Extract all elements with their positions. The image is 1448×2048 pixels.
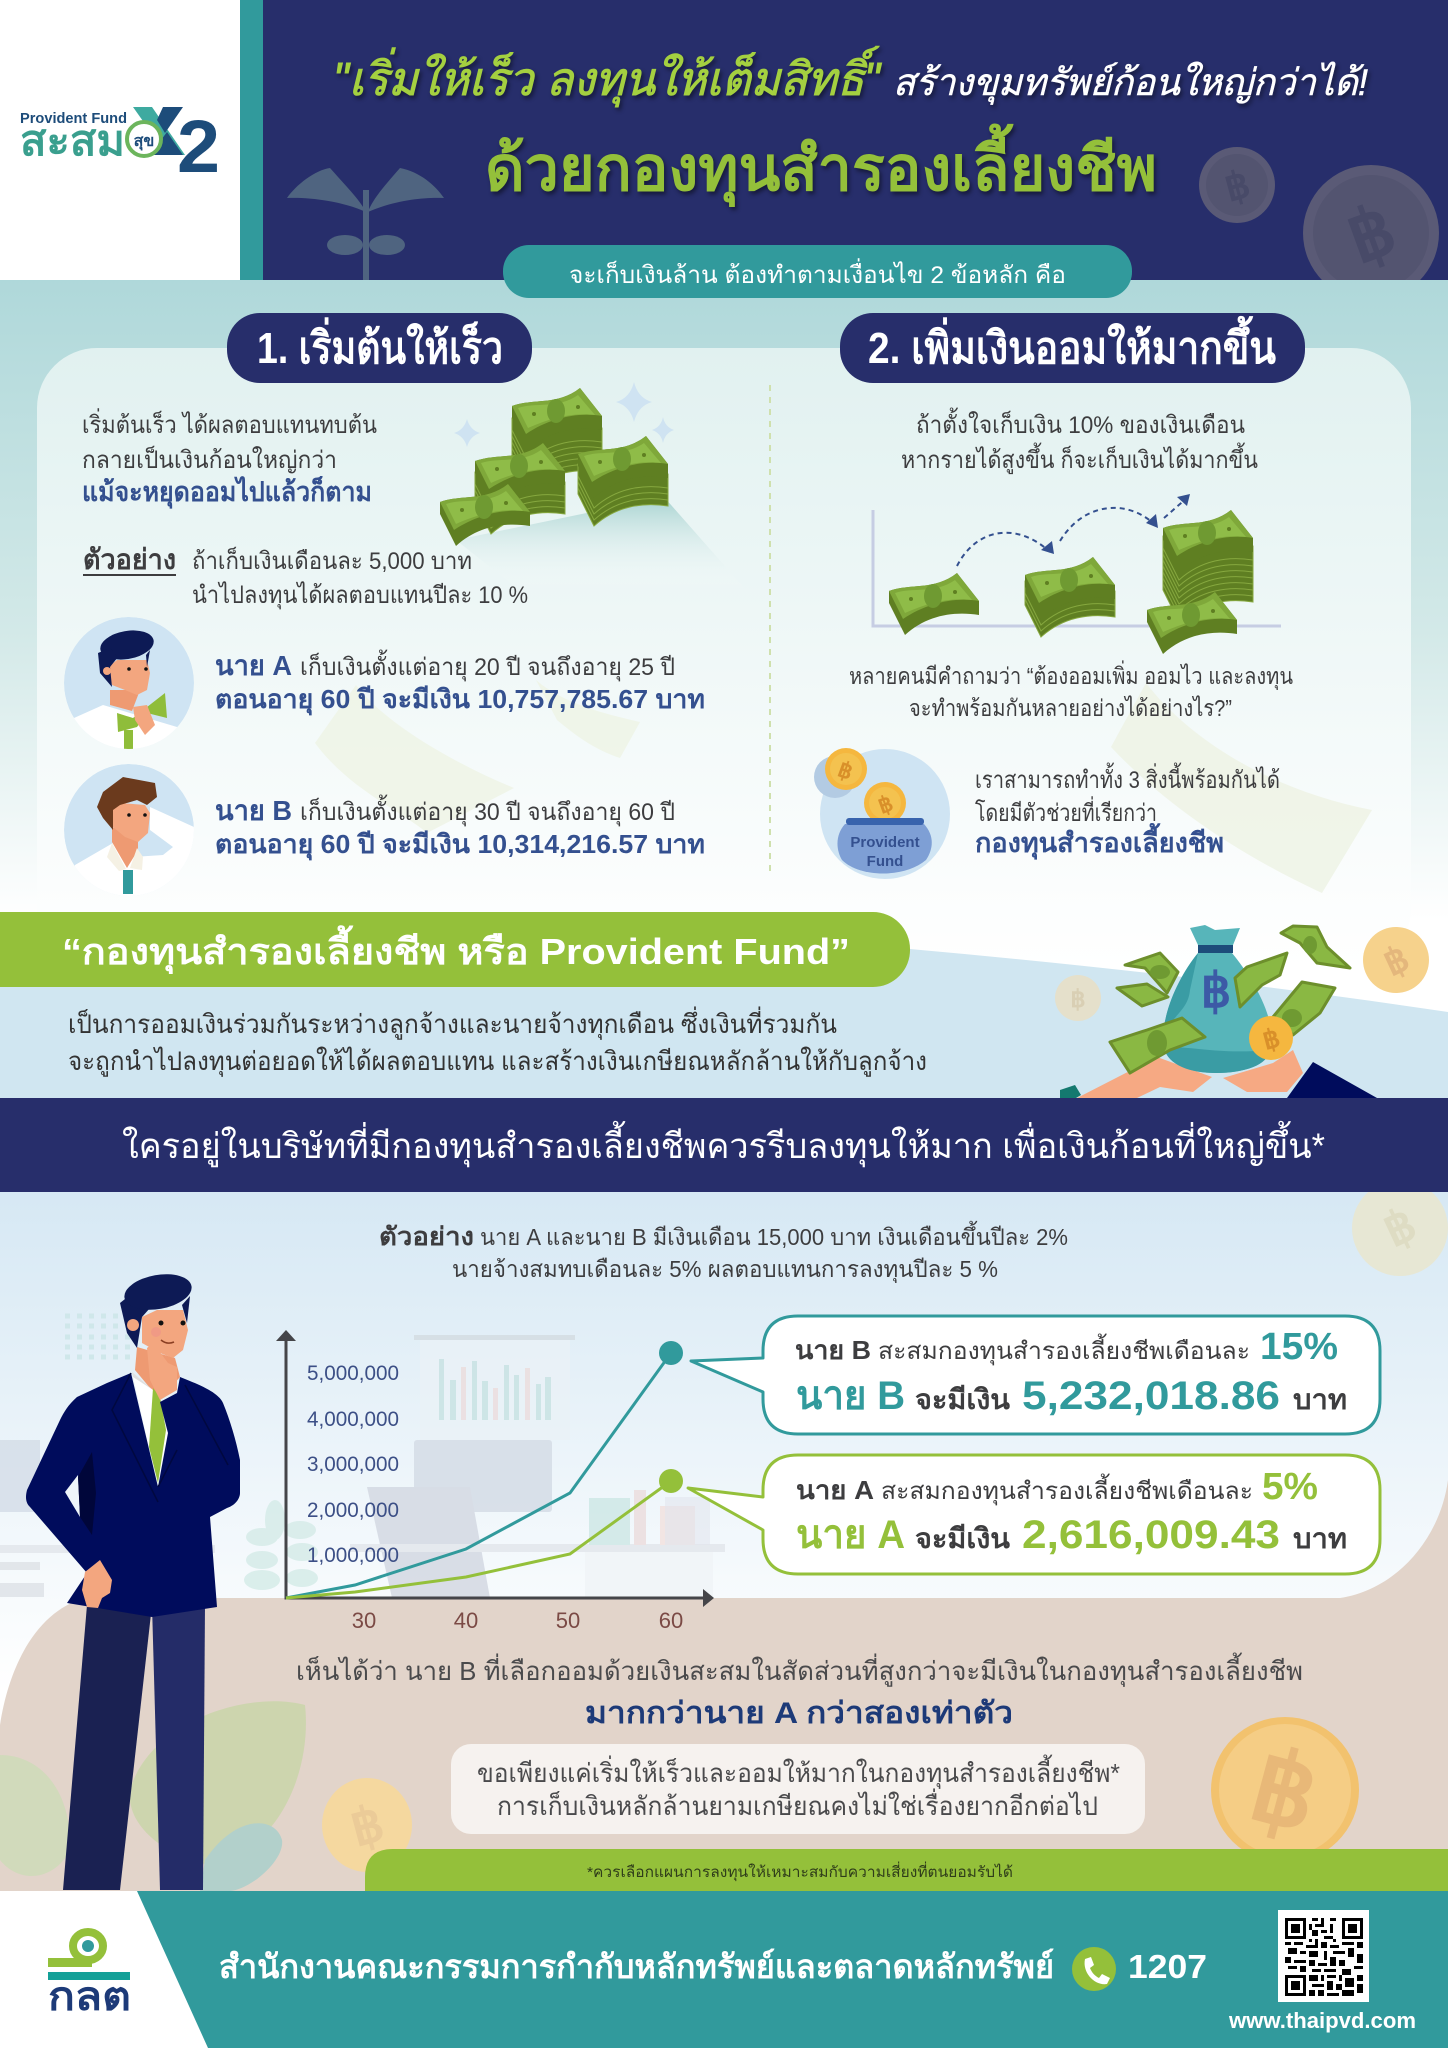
text: example: นำไปลงทุนได้ผลตอบแทนปีละ 10 %: [192, 581, 528, 610]
text: Mr A: นาย A: [215, 650, 292, 681]
gold coin: [1363, 927, 1429, 993]
tie: [149, 1388, 166, 1483]
text: start early: เริ่มต้นเร็ว ได้ผลตอบแทนทบต้น: [82, 408, 377, 439]
callout: Mr B: 15%: [1260, 1326, 1338, 1368]
text: example intro: นายจ้างสมทบเดือนละ 5% ผลตอบแทนการลงทุนปีละ 5 %: [452, 1256, 998, 1283]
money bag illustration: [1055, 925, 1429, 1098]
callout: Mr A: 5%: [1262, 1466, 1318, 1508]
callout: closing message: การเก็บเงินหลักล้านยามเกษียณคงไม่ใช่เรื่องยากอีกต่อไป: [497, 1788, 1098, 1821]
text: Mr B: ตอนอายุ 60 ปี จะมีเงิน 10,314,216.57 บาท: [215, 829, 705, 861]
line chart: [276, 1330, 714, 1633]
pale coin: ฿: [1070, 986, 1086, 1013]
panel: provident fund definition: [0, 912, 1448, 1098]
text: question: จะทำพร้อมกันหลายอย่างได้อย่างไร?”: [909, 695, 1232, 721]
icon: provident fund pot: [814, 748, 950, 879]
face: [142, 1310, 188, 1358]
text: example intro: [379, 1221, 1068, 1283]
bag: [1163, 953, 1272, 1073]
series: Mr B: [286, 1341, 683, 1598]
x labels: 30: [352, 1608, 376, 1633]
text: start early: แม้จะหยุดออมไปแล้วก็ตาม: [82, 474, 372, 509]
footer white area: [0, 1891, 1448, 2048]
icon: provident fund pot: Provident: [850, 834, 920, 851]
callout: Mr A: [688, 1455, 1380, 1574]
QR code: [1278, 1910, 1369, 2002]
y labels: 4,000,000: [307, 1408, 399, 1431]
logo: Provident Fund x2: สะสม: [20, 117, 125, 164]
text: can do all three: [975, 762, 1280, 860]
band: heading: ใครอยู่ในบริษัทที่มีกองทุนสำรองเลี้ยงชีพควรรีบลงทุนให้มาก เพื่อเงินก้อนที่ใหญ่ขึ้น*: [122, 1120, 1325, 1167]
illustration: money stacks: [440, 382, 746, 590]
gold coin: ฿: [1377, 937, 1415, 984]
icon: provident fund pot: ฿: [835, 756, 856, 785]
section: lower background: [0, 1192, 1448, 1692]
text: save more: [901, 407, 1258, 475]
text: Mr B: เก็บเงินตั้งแต่อายุ 30 ปี จนถึงอายุ 60 ปี: [300, 794, 675, 827]
text: conclusion: [296, 1652, 1303, 1730]
logo: Provident Fund x2: 2: [177, 105, 220, 188]
definition text: เป็นการออมเงินร่วมกันระหว่างลูกจ้างและนายจ้างทุกเดือน ซึ่งเงินที่รวมกัน: [68, 1006, 837, 1040]
neck: [135, 1347, 180, 1400]
hands: [1077, 1057, 1212, 1098]
collar: [132, 1372, 153, 1393]
coin on bag: [1249, 1016, 1293, 1060]
decoration: pale coin: ฿: [1375, 1197, 1424, 1257]
logo: SEC: กลต: [48, 1975, 131, 2019]
callout: Mr B: 5,232,018.86: [1022, 1374, 1280, 1418]
text: Mr A: [215, 649, 705, 716]
callout: Mr B: สะสมกองทุนสำรองเลี้ยงชีพเดือนละ: [878, 1333, 1250, 1366]
logo: Provident Fund x2: [20, 105, 220, 188]
illustration: businessman: [26, 1269, 240, 1890]
website: www.thaipvd.com: [1228, 2008, 1416, 2033]
decoration: office background: [0, 1335, 725, 1598]
decoration: dark coins: ฿: [1220, 164, 1255, 210]
chart: growing money stacks: [873, 494, 1281, 654]
text: question: หลายคนมีคำถามว่า “ต้องออมเพิ่ม ออมไว และลงทุน: [849, 660, 1293, 690]
definition text: จะถูกนำไปลงทุนต่อยอดให้ได้ผลตอบแทน และสร้างเงินเกษียณหลักล้านให้กับลูกจ้าง: [68, 1046, 927, 1077]
avatar: Mr A: [64, 617, 194, 749]
text: save more: ถ้าตั้งใจเก็บเงิน 10% ของเงินเดือน: [916, 407, 1245, 439]
navy header panel: [263, 0, 1448, 280]
decoration: dark coins: ฿: [1337, 190, 1406, 278]
heading: 2: [840, 313, 1305, 383]
callout: closing message: ขอเพียงแค่เริ่มให้เร็วและออมให้มากในกองทุนสำรองเลี้ยงชีพ*: [477, 1754, 1120, 1789]
callout: Mr A: บาท: [1293, 1523, 1347, 1554]
icon: phone: [1072, 1947, 1116, 1991]
subtitle pill: [503, 245, 1132, 298]
text: Mr A: เก็บเงินตั้งแต่อายุ 20 ปี จนถึงอายุ 25 ปี: [300, 649, 675, 682]
callout: closing message: [451, 1744, 1145, 1834]
sparkles: [454, 382, 674, 447]
x labels: 60: [659, 1608, 683, 1633]
text: Mr B: นาย B: [215, 795, 292, 826]
callout: Mr A: นาย A: [796, 1475, 874, 1505]
shirt: [133, 1377, 168, 1483]
trousers: [63, 1605, 152, 1890]
panel: main white panel: [37, 348, 1411, 968]
callout: Mr A: สะสมกองทุนสำรองเลี้ยงชีพเดือนละ: [881, 1473, 1253, 1506]
jacket shade: [78, 1452, 96, 1535]
ear and eyes: [127, 1319, 186, 1343]
flying bills: [1110, 926, 1350, 1073]
arm gap: [65, 1475, 80, 1517]
decoration: pale bills: [315, 680, 1372, 893]
text: conclusion: มากกว่านาย A กว่าสองเท่าตัว: [585, 1697, 1013, 1730]
subtitle pill: จะเก็บเงินล้าน ต้องทำตามเงื่อนไข 2 ข้อหลัก คือ: [569, 258, 1066, 289]
footnote band: *ควรเลือกแผนการลงทุนให้เหมาะสมกับความเสี่ยงที่ตนยอมรับได้: [587, 1861, 1013, 1882]
text: Mr A: ตอนอายุ 60 ปี จะมีเงิน 10,757,785.67 บาท: [215, 684, 705, 716]
heading: 1: [227, 313, 532, 383]
y labels: 1,000,000: [307, 1544, 399, 1567]
logo: Provident Fund x2: สุข: [134, 133, 154, 151]
background wedge: [0, 945, 1448, 1098]
text: example intro: นาย A และนาย B มีเงินเดือน 15,000 บาท เงินเดือนขึ้นปีละ 2%: [480, 1221, 1068, 1250]
text: example intro: ตัวอย่าง: [379, 1223, 474, 1251]
y labels: 5,000,000: [307, 1362, 399, 1385]
lapels: [112, 1373, 228, 1502]
callout: Mr B: นาย B: [796, 1374, 905, 1418]
icon: provident fund pot: ฿: [875, 790, 896, 819]
pale coin: [1055, 975, 1101, 1021]
light beam: [456, 497, 746, 590]
decoration: dark coins: [1199, 147, 1439, 301]
title: ด้วยกองทุนสำรองเลี้ยงชีพ: [485, 123, 1157, 207]
callout: Mr B: จะมีเงิน: [915, 1384, 1010, 1415]
footer: [0, 1891, 1448, 2048]
x labels: 40: [454, 1608, 478, 1633]
hand on chin: [147, 1343, 177, 1400]
title: [333, 46, 1368, 207]
decoration: pale coin on ground: ฿: [345, 1795, 390, 1857]
title: สร้างขุมทรัพย์ก้อนใหญ่กว่าได้!: [893, 61, 1368, 105]
teal accent band: [240, 0, 263, 280]
banner: [0, 912, 910, 987]
text: example: ตัวอย่าง: [83, 544, 176, 575]
coin on bag: ฿: [1259, 1022, 1283, 1056]
series: Mr A: [286, 1469, 683, 1598]
callout: Mr A: จะมีเงิน: [915, 1523, 1010, 1554]
definition text: [68, 1006, 927, 1077]
hair: [120, 1269, 194, 1348]
decoration: sprout: [287, 168, 444, 280]
text: can do all three: โดยมีตัวช่วยที่เรียกว่า: [975, 796, 1157, 827]
banner title: “กองทุนสำรองเลี้ยงชีพ หรือ Provident Fund”: [62, 925, 850, 975]
text: question: [849, 660, 1293, 721]
text: start early: [82, 408, 377, 509]
logo: SEC: [48, 1932, 131, 2019]
callout: Mr A: นาย A: [796, 1513, 905, 1557]
title: "เริ่มให้เร็ว ลงทุนให้เต็มสิทธิ์": [333, 46, 883, 107]
sleeves: [1287, 1062, 1377, 1098]
callout: Mr A: 2,616,009.43: [1022, 1513, 1280, 1557]
divider: [769, 385, 771, 873]
phone number: 1207: [1128, 1948, 1207, 1985]
callout: Mr B: บาท: [1293, 1384, 1347, 1415]
x labels: 50: [556, 1608, 580, 1633]
decoration: tropical leaves: [0, 1701, 306, 1891]
header: [0, 0, 1448, 301]
footer title: สำนักงานคณะกรรมการกำกับหลักทรัพย์และตลาดหลักทรัพย์: [219, 1948, 1054, 1985]
y labels: 2,000,000: [307, 1499, 399, 1522]
text: start early: กลายเป็นเงินก้อนใหญ่กว่า: [82, 445, 337, 474]
axes: [286, 1340, 706, 1598]
text: save more: หากรายได้สูงขึ้น ก็จะเก็บเงินได้มากขึ้น: [901, 442, 1258, 475]
heading: 1: 1. เริ่มต้นให้เร็ว: [257, 317, 503, 373]
text: can do all three: เราสามารถทำทั้ง 3 สิ่งนี้พร้อมกันได้: [975, 762, 1280, 794]
footnote band: [365, 1849, 1448, 1891]
decoration: dot grid: [65, 1316, 132, 1357]
page background: upper section: [0, 280, 1448, 920]
arrows: [957, 497, 1188, 566]
decoration: large gold coin: ฿: [1240, 1729, 1330, 1853]
beige ground shape: [0, 1480, 1448, 1891]
icon: provident fund pot: Fund: [867, 853, 903, 870]
jacket: [26, 1373, 240, 1617]
y labels: [307, 1362, 399, 1567]
x labels: [352, 1608, 683, 1633]
text: Mr B: [215, 794, 705, 861]
decoration: large gold coin: [1211, 1717, 1359, 1863]
text: example: [83, 544, 528, 610]
y labels: 3,000,000: [307, 1453, 399, 1476]
logo: Provident Fund x2: Provident Fund: [20, 110, 127, 127]
footer teal panel: [137, 1891, 1448, 2048]
decoration: pale coin: [1352, 1180, 1448, 1276]
text: example: ถ้าเก็บเงินเดือนละ 5,000 บาท: [192, 546, 472, 575]
money bag illustration: ฿: [1201, 965, 1231, 1018]
avatar: Mr B: [60, 764, 194, 900]
band: heading: [0, 1098, 1448, 1192]
text: conclusion: เห็นได้ว่า นาย B ที่เลือกออมด้วยเงินสะสมในสัดส่วนที่สูงกว่าจะมีเงินในกองทุนสำรองเลี้ยงชีพ: [296, 1652, 1303, 1687]
text: can do all three: กองทุนสำรองเลี้ยงชีพ: [975, 822, 1224, 860]
logo box: [0, 0, 240, 280]
callout: Mr B: [691, 1316, 1380, 1434]
heading: 2: 2. เพิ่มเงินออมให้มากขึ้น: [868, 315, 1276, 373]
callout: Mr B: นาย B: [795, 1335, 871, 1365]
decoration: pale coin on ground: [322, 1778, 412, 1872]
hand on hip: [82, 1560, 112, 1608]
